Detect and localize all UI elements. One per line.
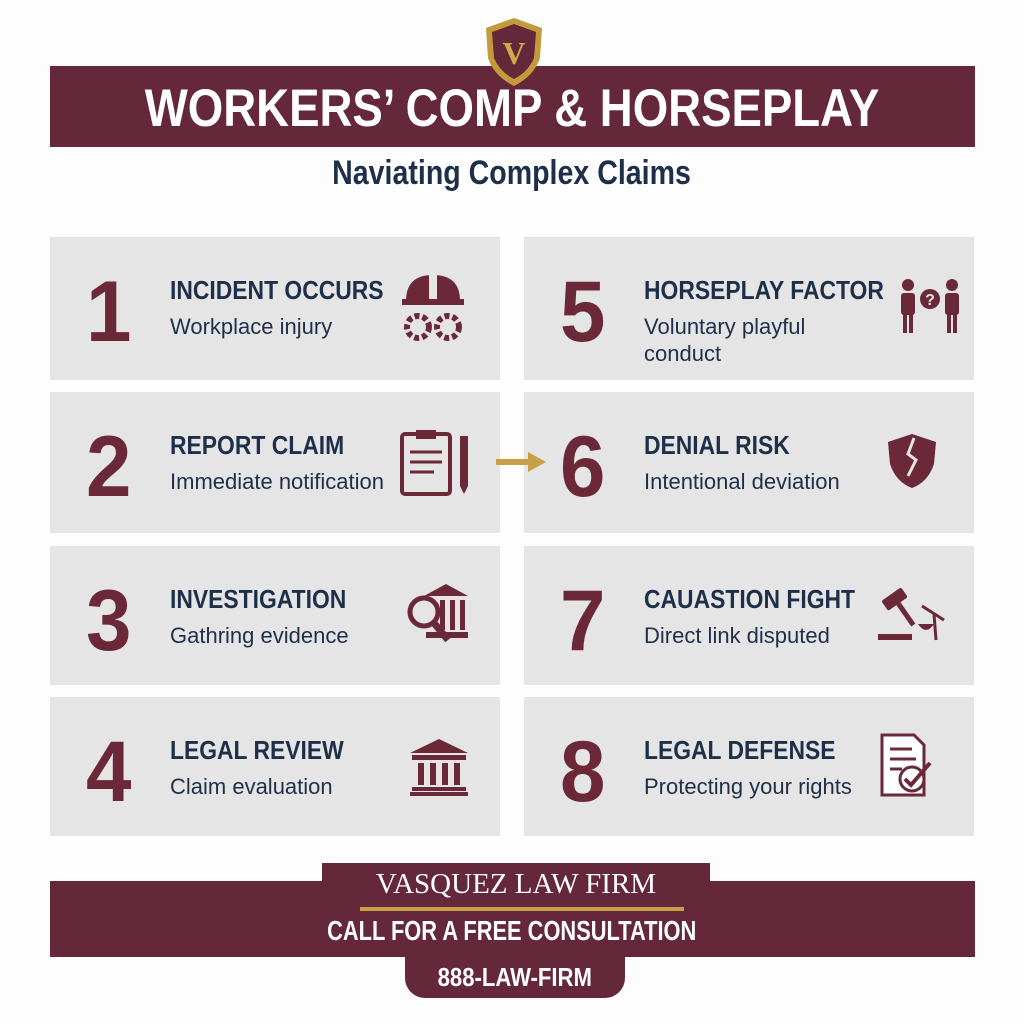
- card 7: 7: [560, 573, 605, 669]
- card 6: 6: [560, 419, 605, 515]
- firm name: VASQUEZ LAW FIRM: [376, 868, 656, 900]
- icon: clipboard pencil: [400, 430, 468, 496]
- card 2: Immediate notification: [170, 469, 384, 494]
- card 2: 2: [86, 419, 131, 515]
- card 4: LEGAL REVIEW: [170, 735, 344, 765]
- card 7: CAUASTION FIGHT: [644, 584, 855, 614]
- phone pill: 888-LAW-FIRM: [438, 962, 592, 992]
- card 1: Workplace injury: [170, 314, 332, 339]
- card 4: [50, 697, 500, 836]
- card 2: [50, 392, 500, 533]
- card 3: Gathring evidence: [170, 623, 349, 648]
- title: WORKERS’ COMP & HORSEPLAY: [145, 79, 880, 138]
- card 4: Claim evaluation: [170, 774, 333, 799]
- footer tab: [322, 863, 710, 903]
- icon: hard hat gears: [402, 275, 464, 341]
- card 1: INCIDENT OCCURS: [170, 275, 384, 305]
- logo shield: [486, 18, 542, 86]
- call to action: CALL FOR A FREE CONSULTATION: [327, 915, 697, 946]
- card 6: DENIAL RISK: [644, 430, 790, 460]
- arrow: card 2 to card 6: [496, 452, 546, 472]
- card 8: LEGAL DEFENSE: [644, 735, 836, 765]
- card 5: HORSEPLAY FACTOR: [644, 275, 884, 305]
- logo shield: V: [502, 35, 526, 71]
- phone pill: [405, 957, 625, 998]
- header band: [50, 66, 975, 147]
- icon: document check: [880, 734, 932, 796]
- card 7: [524, 546, 974, 685]
- card 3: 3: [86, 573, 131, 669]
- card 3: INVESTIGATION: [170, 584, 346, 614]
- card 8: 8: [560, 724, 605, 820]
- icon: two people question: ?: [925, 292, 935, 309]
- card 4: 4: [86, 724, 131, 820]
- card 1: 1: [86, 264, 131, 360]
- footer band: [50, 881, 975, 957]
- icon: broken shield: [888, 434, 936, 488]
- icon: magnifier building: [408, 584, 468, 642]
- card 1: [50, 237, 500, 380]
- icon: courthouse: [410, 739, 468, 796]
- card 6: [524, 392, 974, 533]
- icon: gavel scales: [878, 588, 945, 640]
- card 2: REPORT CLAIM: [170, 430, 344, 460]
- subtitle: Naviating Complex Claims: [333, 154, 691, 192]
- card 5: [524, 237, 974, 380]
- card 7: Direct link disputed: [644, 623, 830, 648]
- card 8: Protecting your rights: [644, 774, 852, 799]
- card 3: [50, 546, 500, 685]
- card 5: Voluntary playful: [644, 314, 805, 339]
- card 8: [524, 697, 974, 836]
- card 6: Intentional deviation: [644, 469, 840, 494]
- gold line: [360, 907, 684, 911]
- card 5: conduct: [644, 341, 721, 366]
- card 5: 5: [560, 264, 605, 360]
- icon: two people question: [901, 279, 959, 333]
